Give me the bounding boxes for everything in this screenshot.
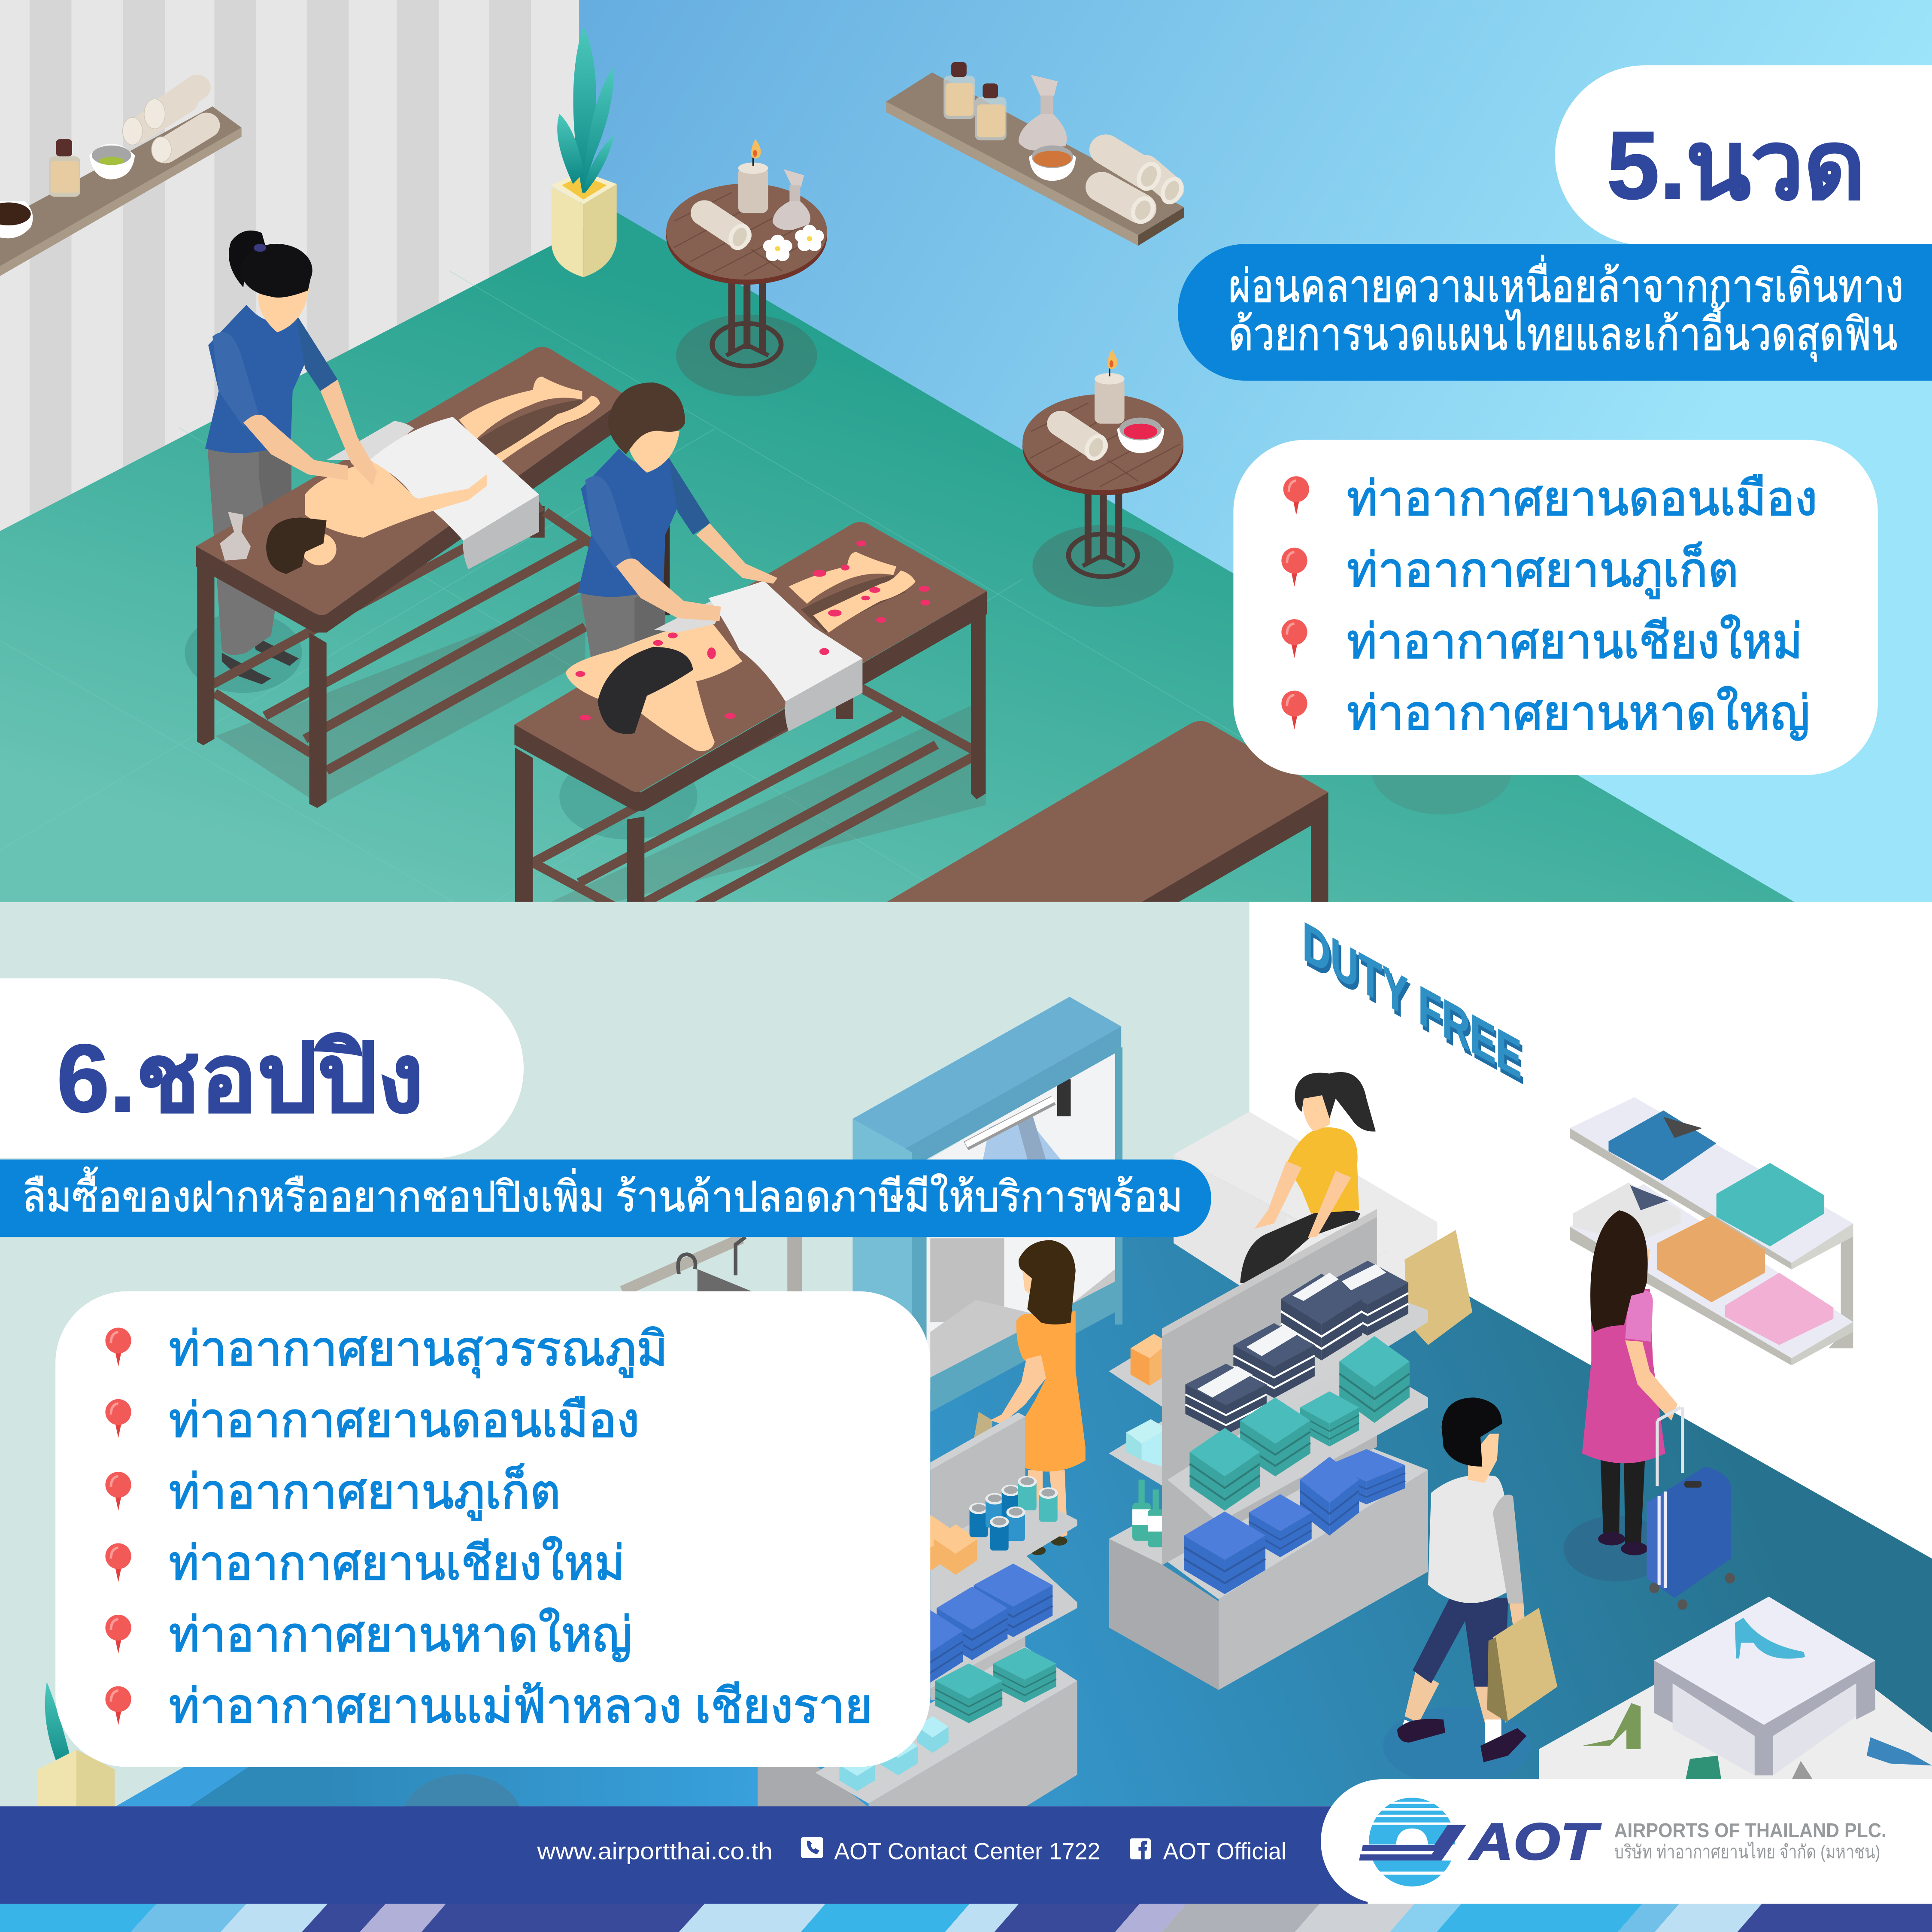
product: bottles (1132, 1479, 1164, 1547)
illustration: massage room scene (0, 26, 987, 934)
main island shelf (1109, 1209, 1428, 1690)
product: drink cans (969, 1476, 1058, 1551)
wall shelf with towels and bottles (0, 88, 242, 276)
icon: location pin (1283, 476, 1309, 515)
person: therapist 2 arms (616, 523, 777, 621)
icon: blue flat shoe (1867, 1737, 1932, 1765)
product: orange boxes (907, 1515, 977, 1575)
text: Suvarnabhumi: ท่าอากาศยานสุวรรณภูมิ (169, 1322, 668, 1378)
icon: AOT logo mark (1356, 1798, 1466, 1887)
icon: location pin (105, 1686, 131, 1725)
text: DUTY FREE wall sign: DUTY FREE (1305, 914, 1524, 1096)
panel: massage airport list (1233, 440, 1878, 775)
clothing display alcove (852, 997, 1122, 1412)
panel: massage description (1178, 244, 1932, 381)
table: edge of third massage bed (885, 721, 1328, 903)
icon: teal shoe (1686, 1756, 1721, 1780)
icon: location pin (105, 1399, 131, 1438)
icon: round table with candle, towel, pouch and flowers (666, 139, 827, 396)
title: 5. massage: 5.นวด (1607, 112, 1865, 219)
person: client 2 lying on bed with petals (566, 541, 930, 751)
text: facebook page: AOT Official (1163, 1838, 1286, 1865)
panel: shopping description (0, 1160, 1211, 1237)
text: Mae Fah Luang Chiang Rai: ท่าอากาศยานแม่ฟ้าหลวง เชียงราย (169, 1679, 872, 1733)
icon: bottom left potted plant (38, 1682, 115, 1806)
person: therapist 2 body (578, 383, 710, 661)
text: website: www.airportthai.co.th (537, 1838, 773, 1865)
person: therapist 1 body (185, 231, 338, 693)
person: client 1 lying on bed (220, 377, 600, 574)
icon: location pin (1281, 548, 1307, 586)
icon: location pin (105, 1472, 131, 1510)
icon: phone (801, 1837, 823, 1858)
table: massage bed 2 (514, 522, 987, 934)
icon: round table 2 with candle, towel and petal bowl (1022, 349, 1183, 607)
table: massage bed 1 (196, 347, 670, 808)
bottom colour stripes (0, 1904, 1932, 1932)
icon: potted plant (552, 26, 617, 277)
wall shelf with bottles, herbal pouch, bowl and towels (886, 62, 1187, 246)
product: orange boxes (1131, 1334, 1162, 1386)
panel: shopping section background (0, 902, 1932, 1861)
store scene right side (1109, 1072, 1932, 1785)
person: therapist 1 arms (243, 380, 377, 486)
wall shelves with folded shirts (1570, 1097, 1853, 1365)
text: contact center: AOT Contact Center 1722 (834, 1838, 1100, 1865)
icon: shopping bag (1404, 1230, 1472, 1345)
panel: heading 5 massage (1555, 65, 1932, 245)
text: Phuket: ท่าอากาศยานภูเก็ต (1347, 542, 1738, 599)
floor shadow of hidden stool (1371, 726, 1512, 814)
icon: location pin (1281, 619, 1307, 658)
title: 6. shopping: 6.ชอปปิง (57, 1025, 424, 1132)
icon: location pin (105, 1543, 131, 1582)
text: Don Mueang: ท่าอากาศยานดอนเมือง (1347, 472, 1817, 526)
text: Phuket: ท่าอากาศยานภูเก็ต (169, 1464, 561, 1521)
text: Hat Yai: ท่าอากาศยานหาดใหญ่ (169, 1608, 632, 1662)
left store shelf unit with orange-dress shopper (758, 1240, 1086, 1807)
product: teal folded stacks (935, 1647, 1056, 1723)
product: light blue boxes (840, 1716, 949, 1791)
product: blue folded stacks (1184, 1449, 1405, 1594)
seated woman on bench (1174, 1072, 1437, 1322)
product: teal folded stacks (1190, 1336, 1410, 1511)
clothing rail behind list (622, 1237, 802, 1294)
text: Chiang Mai: ท่าอากาศยานเชียงใหม่ (1347, 615, 1803, 668)
person: man with shopping bag (1383, 1397, 1557, 1785)
product: dark folded stacks (1185, 1261, 1408, 1435)
icon: green sandal (1582, 1703, 1641, 1749)
icon: high heel shoe (1735, 1618, 1805, 1659)
text: DUTY FREE wall sign (1302, 909, 1524, 1096)
panel: AOT logo plate (1321, 1779, 1932, 1904)
panel: massage section background (0, 0, 1932, 903)
panel: shopping airport list (55, 1291, 930, 1767)
icon: location pin (1281, 691, 1307, 729)
text: AOT wordmark: AOT (1468, 1813, 1601, 1871)
text: description: ลืมซื้อของฝากหรืออยากชอปปิงเพิ่ม ร้านค้าปลอดภาษีมีให้บริการพร้อม (22, 1166, 1183, 1220)
product: blue folded stacks (896, 1564, 1052, 1683)
icon: facebook (1130, 1838, 1151, 1859)
person: woman in pink dress with suitcase (1564, 1210, 1735, 1610)
text: company name English: AIRPORTS OF THAILAND PLC. (1614, 1819, 1887, 1841)
text: company name Thai: บริษัท ท่าอากาศยานไทย จำกัด (มหาชน) (1614, 1841, 1880, 1862)
icon: grey shoe (1792, 1761, 1813, 1780)
text: Chiang Mai: ท่าอากาศยานเชียงใหม่ (169, 1536, 625, 1590)
text: Hat Yai: ท่าอากาศยานหาดใหญ่ (1347, 686, 1810, 741)
footer band (0, 1806, 1368, 1905)
icon: location pin (105, 1615, 131, 1653)
text: DUTY FREE wall sign: DUTY FREE (1302, 909, 1522, 1091)
product: mint boxes (1126, 1419, 1162, 1467)
text: Don Mueang: ท่าอากาศยานดอนเมือง (169, 1393, 640, 1447)
person: woman in orange dress (974, 1240, 1086, 1555)
panel: heading 6 shopping (0, 978, 524, 1158)
shoe display table (1539, 1597, 1932, 1785)
icon: location pin (105, 1327, 131, 1367)
